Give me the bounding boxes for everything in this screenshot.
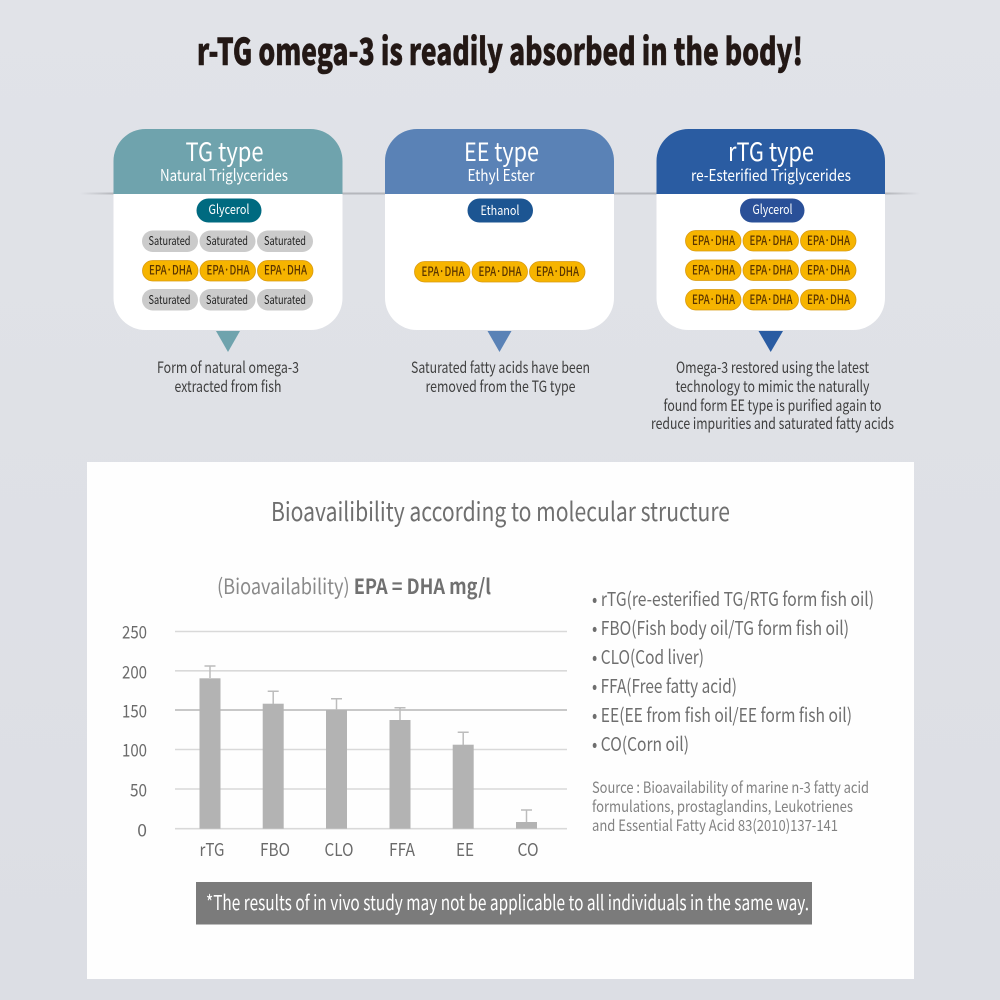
molecule grid: rTG: EPA·DHA: [807, 230, 851, 249]
label: Glycerol: [740, 198, 804, 222]
panel: EE type: Ethyl Ester: [468, 162, 535, 186]
description: rTG: [651, 356, 894, 434]
source note: Source : Bioavailability of marine n-3 fatty acid: [592, 776, 869, 798]
panel: rTG type: [656, 129, 885, 330]
legend list: • FFA(Free fatty acid): [592, 672, 737, 699]
molecule grid: TG: EPA·DHA: [264, 260, 308, 278]
molecule grid: TG: Saturated: [148, 291, 190, 308]
molecule grid: TG: Saturated: [148, 232, 190, 249]
label: Ethanol: [468, 198, 533, 222]
description: EE: Saturated fatty acids have been: [411, 356, 590, 378]
molecule grid: TG: [142, 230, 313, 310]
chart subtitle: (Bioavailability) EPA = DHA mg/l: [217, 571, 491, 601]
label: Glycerol: Glycerol: [752, 199, 793, 218]
source note: and Essential Fatty Acid 83(2010)137-141: [592, 814, 838, 836]
disclaimer banner: [196, 882, 812, 924]
bar chart: CLO: [324, 837, 354, 862]
molecule grid: EE: EPA·DHA: [536, 261, 580, 280]
description: rTG: technology to mimic the naturally: [676, 375, 870, 397]
description: rTG: found form EE type is purified again to: [664, 394, 882, 416]
description: EE: removed from the TG type: [426, 375, 576, 397]
legend list: • FBO(Fish body oil/TG form fish oil): [592, 614, 849, 641]
molecule grid: rTG: EPA·DHA: [750, 260, 793, 278]
molecule grid: rTG: EPA·DHA: [807, 289, 851, 308]
molecule grid: TG: EPA·DHA: [206, 260, 250, 278]
molecule grid: rTG: EPA·DHA: [807, 260, 851, 278]
molecule grid: rTG: EPA·DHA: [750, 230, 793, 249]
molecule grid: rTG: EPA·DHA: [692, 260, 736, 278]
description: TG: [157, 356, 299, 397]
description: rTG: reduce impurities and saturated fatty acids: [651, 412, 894, 434]
arrow: EE: [488, 331, 512, 352]
molecule grid: TG: Saturated: [264, 232, 306, 249]
disclaimer banner: *The results of in vivo study may not be applicable to all individuals in the same way.: [206, 886, 809, 916]
arrow: rTG: [758, 331, 783, 352]
molecule grid: TG: Saturated: [206, 232, 248, 249]
bar chart: 200: [122, 660, 147, 684]
molecule grid: TG: Saturated: [206, 291, 248, 308]
source note: formulations, prostaglandins, Leukotrienes: [592, 795, 853, 817]
panel: rTG type: rTG type: [728, 132, 814, 169]
bar chart: 0: [137, 818, 147, 842]
panel: bioavailability: [87, 462, 914, 979]
panel: TG type: [114, 129, 342, 330]
legend list: [592, 585, 874, 757]
legend list: • CO(Corn oil): [592, 730, 689, 757]
description: EE: [411, 356, 590, 397]
panel: TG type: TG type: [186, 132, 264, 169]
molecule grid: EE: EPA·DHA: [422, 261, 465, 280]
molecule grid: EE: [414, 261, 585, 282]
bar chart: [122, 620, 567, 862]
bar chart: 250: [122, 620, 147, 644]
panel: EE type: [385, 129, 614, 330]
panel: rTG type: re-Esterified Triglycerides: [691, 162, 851, 186]
panel: EE type: EE type: [464, 132, 539, 169]
legend list: • EE(EE from fish oil/EE form fish oil): [592, 701, 852, 728]
molecule grid: TG: Saturated: [264, 291, 306, 308]
bar chart: rTG: [200, 837, 224, 862]
legend list: • rTG(re-esterified TG/RTG form fish oil): [592, 585, 874, 612]
label: Glycerol: Glycerol: [208, 199, 250, 218]
molecule grid: EE: EPA·DHA: [478, 261, 522, 280]
molecule grid: rTG: EPA·DHA: [692, 289, 736, 308]
panel: TG type: Natural Triglycerides: [160, 162, 288, 186]
bar chart: FFA: [389, 837, 415, 862]
molecule grid: rTG: [686, 230, 856, 310]
chart heading: Bioavailibility according to molecular structure: [271, 492, 730, 529]
description: rTG: Omega-3 restored using the latest: [676, 356, 869, 378]
bar chart: EE: [456, 837, 474, 862]
description: TG: extracted from fish: [174, 375, 282, 397]
bar chart: 100: [122, 738, 147, 762]
arrow: TG: [216, 331, 240, 352]
description: TG: Form of natural omega-3: [157, 356, 299, 378]
legend list: • CLO(Cod liver): [592, 643, 704, 670]
bar chart: CO: [518, 837, 538, 862]
bar chart: 150: [122, 698, 147, 724]
bar chart: FBO: [260, 837, 290, 862]
label: Ethanol: Ethanol: [480, 200, 520, 219]
source note: [592, 776, 869, 836]
label: Glycerol: [196, 198, 262, 222]
molecule grid: rTG: EPA·DHA: [750, 289, 793, 308]
molecule grid: rTG: EPA·DHA: [692, 230, 736, 249]
molecule grid: TG: EPA·DHA: [149, 260, 193, 278]
bar chart: 50: [130, 778, 147, 802]
